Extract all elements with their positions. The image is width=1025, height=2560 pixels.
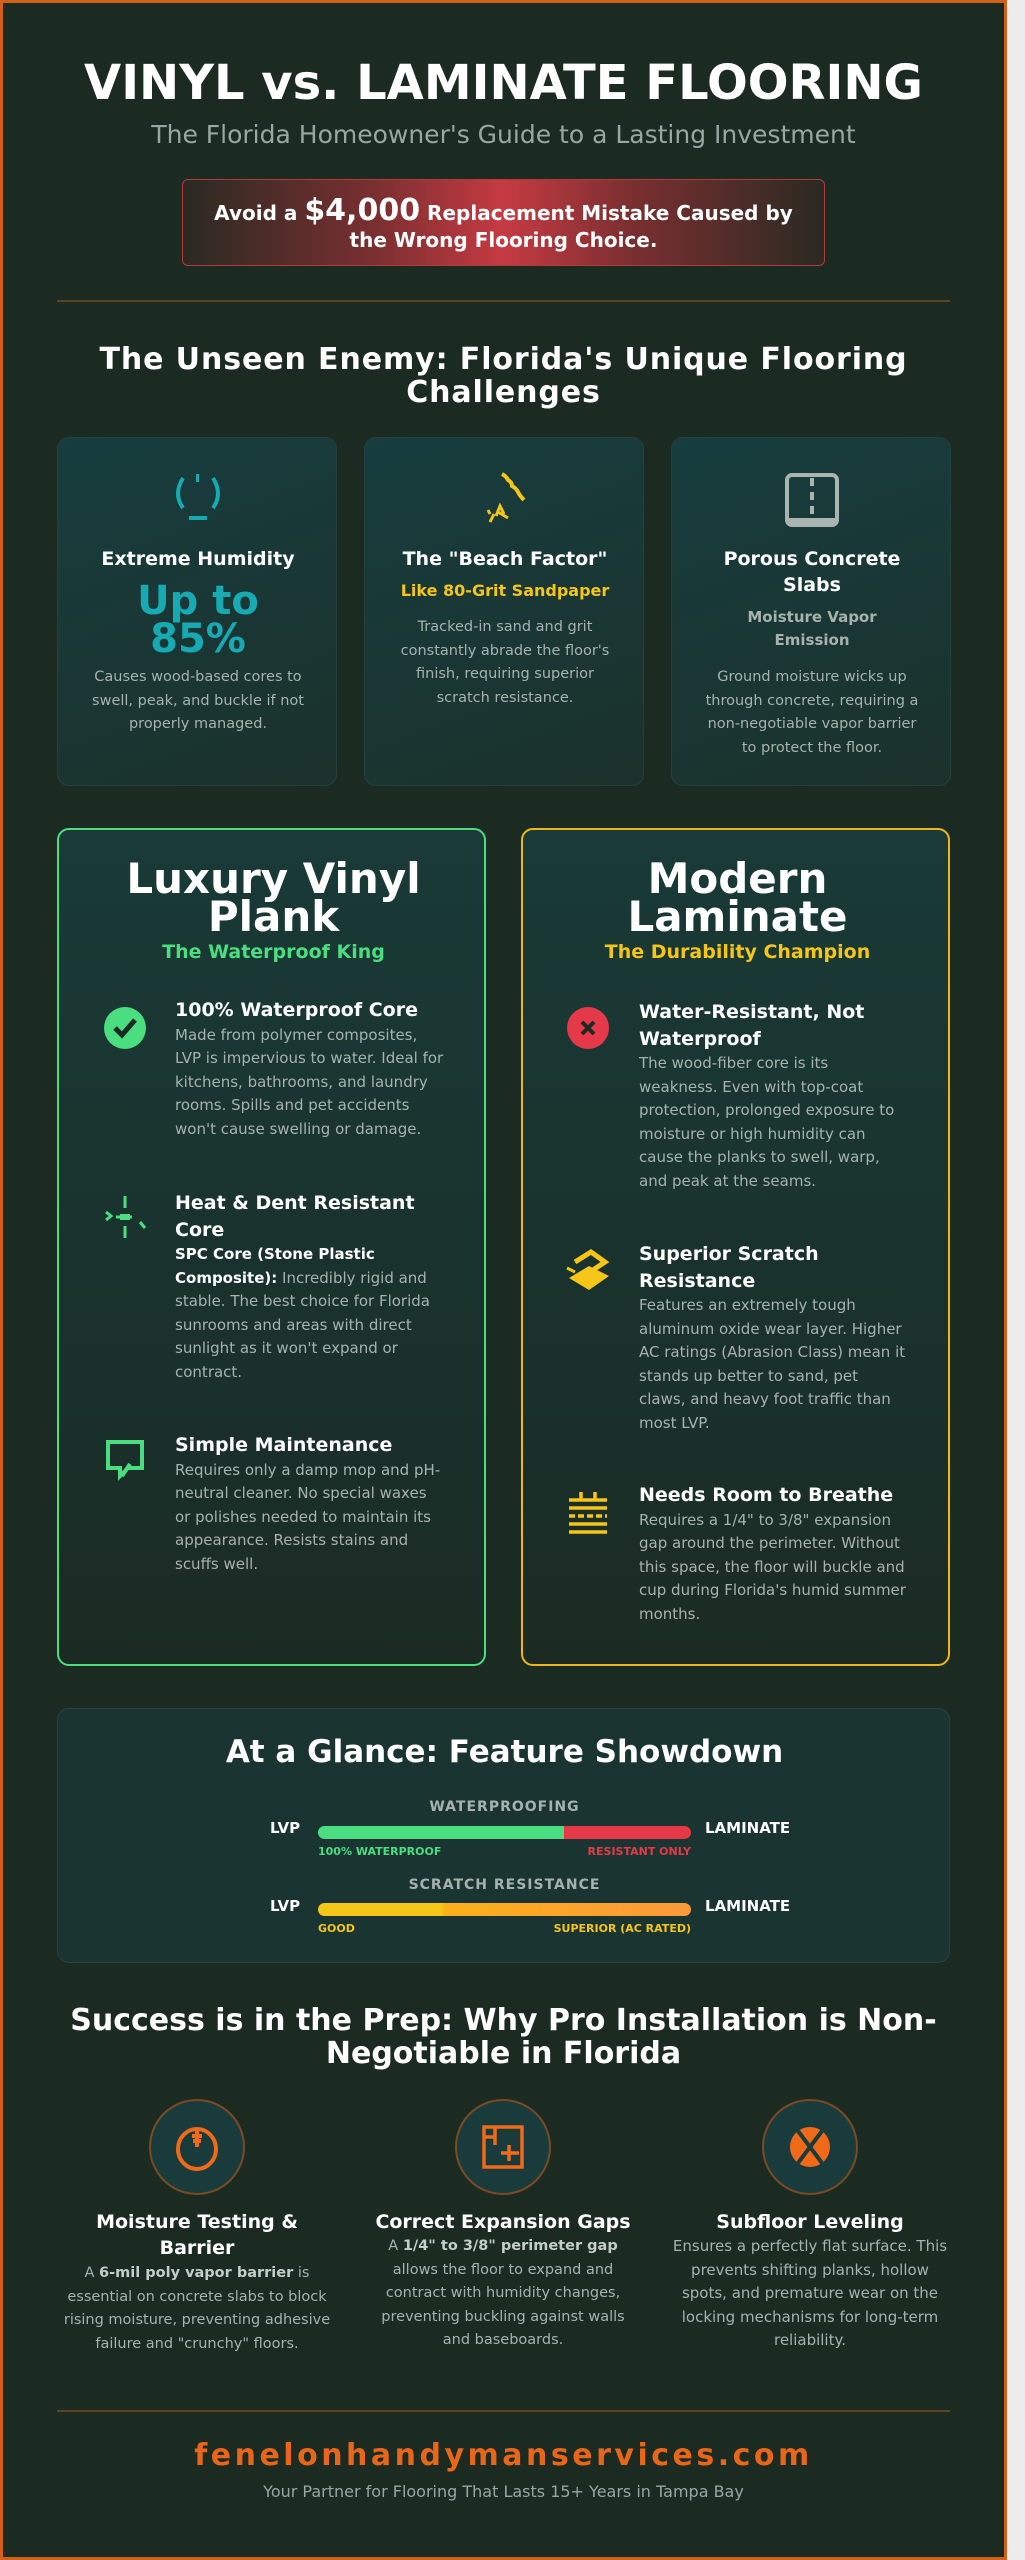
heading: unseen enemy	[99, 342, 908, 410]
item: heat & dent	[175, 1192, 430, 1380]
card text	[706, 669, 918, 756]
item: water-resistant: and peak at the seams.	[639, 1172, 816, 1190]
callout: $4,000 warning: Avoid a $4,000 Replacement Mistake Caused by	[214, 193, 793, 228]
item: waterproof core: rooms. Spills and pet accidents	[175, 1096, 409, 1114]
panel: luxury vinyl plank	[57, 828, 486, 1666]
item: water-resistant: moisture or high humidity can	[639, 1124, 866, 1142]
chart: scratch resistance: LAMINATE	[705, 1897, 790, 1915]
item: waterproof core: Made from polymer composites,	[175, 1026, 417, 1044]
item: heat & dent: sunrooms and areas with direct	[175, 1316, 412, 1334]
item: waterproof core: won't cause swelling or damage.	[175, 1120, 421, 1138]
item: water-resistant: protection, prolonged exposure to	[639, 1101, 894, 1119]
column: expansion gaps	[375, 2099, 631, 2348]
chart: waterproofing: WATERPROOFING	[429, 1799, 580, 1815]
text: A 6-mil poly vapor barrier is essential on concrete slabs to block rising moisture, preventing adhesive failure and "crunchy" floors.	[64, 2265, 330, 2352]
item: heat & dent: contract.	[175, 1362, 242, 1380]
icon: x	[567, 1007, 609, 1049]
column: moisture testing	[64, 2099, 330, 2352]
item: water-resistant: cause the planks to swell, warp,	[639, 1148, 880, 1166]
item: simple maintenance: appearance. Resists stains and	[175, 1531, 408, 1549]
footer: tagline: Your Partner for Flooring That Lasts 15+ Years in Tampa Bay	[263, 2482, 744, 2501]
title: Subfloor Leveling	[716, 2211, 904, 2233]
text: Ensures a perfectly flat surface. This prevents shifting planks, hollow spots, and premature wear on the locking mechanisms for long-term reliability.	[673, 2237, 947, 2349]
item: scratch resistance: claws, and heavy foot traffic than	[639, 1390, 891, 1408]
card subtitle: Like 80-Grit Sandpaper	[401, 581, 609, 600]
chart: scratch resistance: SCRATCH RESISTANCE	[409, 1877, 600, 1893]
icon: floor plan	[455, 2099, 551, 2195]
item: scratch resistance: Resistance	[639, 1270, 755, 1292]
title: Correct Expansion Gaps	[375, 2211, 631, 2233]
item: needs room to breathe: months.	[639, 1604, 700, 1622]
item: scratch resistance: Superior Scratch	[639, 1243, 819, 1265]
callout: $4,000 warning: the Wrong Flooring Choice.	[350, 228, 657, 252]
title: Barrier	[160, 2237, 234, 2259]
chart: waterproofing: 100% WATERPROOF	[318, 1845, 441, 1858]
card subtitle	[747, 608, 877, 649]
heading: unseen enemy: Challenges	[406, 375, 601, 410]
item: waterproof core: 100% Waterproof Core	[175, 999, 418, 1021]
item: simple maintenance: or polishes needed to maintain its	[175, 1508, 431, 1526]
item: needs room to breathe: cup during Florida's humid summer	[639, 1581, 906, 1599]
item: water-resistant: The wood-fiber core is its	[639, 1054, 828, 1072]
icon: level	[762, 2099, 858, 2195]
card subtitle: Moisture Vapor	[747, 608, 877, 626]
icon: check	[104, 1007, 146, 1049]
panel: beach factor	[364, 437, 644, 786]
tagline: The Durability Champion	[605, 941, 870, 963]
item: heat & dent: Core	[175, 1218, 224, 1240]
heading: At a Glance: Feature Showdown	[226, 1734, 783, 1770]
text: A 1/4" to 3/8" perimeter gap allows the floor to expand and contract with humidity changes, preventing buckling against walls and baseboards.	[381, 2238, 625, 2348]
item: scratch resistance: aluminum oxide wear layer. Higher	[639, 1320, 902, 1338]
chart: scratch resistance	[270, 1877, 790, 1935]
item: heat & dent: Heat & Dent Resistant	[175, 1192, 415, 1214]
item: heat & dent: sunlight as it won't expand or	[175, 1339, 398, 1357]
heading: unseen enemy: The Unseen Enemy: Florida's Unique Flooring	[99, 342, 908, 377]
panel title	[126, 854, 421, 941]
item: water-resistant: weakness. Even with top-coat	[639, 1078, 863, 1096]
item: simple maintenance: scuffs well.	[175, 1554, 258, 1572]
chart: scratch resistance: LVP	[270, 1897, 300, 1915]
item: scratch resistance: Features an extremely tough	[639, 1296, 856, 1314]
card text: through concrete, requiring a	[706, 692, 918, 708]
card text: Tracked-in sand and grit constantly abrade the floor's finish, requiring superior scratch resistance.	[401, 619, 609, 706]
panel title	[627, 854, 848, 941]
panel title: Luxury Vinyl	[126, 854, 421, 903]
card text: to protect the floor.	[742, 740, 882, 756]
item: scratch resistance: AC ratings (Abrasion Class) mean it	[639, 1343, 905, 1361]
card text: non-negotiable vapor barrier	[708, 716, 916, 732]
item: water-resistant	[638, 1001, 894, 1190]
title: VINYL vs. LAMINATE FLOORING	[84, 55, 923, 111]
stat: up to 85%	[137, 578, 259, 662]
card title: Porous Concrete	[724, 548, 900, 570]
item: water-resistant: Water-Resistant, Not	[639, 1001, 864, 1023]
card text: Ground moisture wicks up	[717, 669, 907, 685]
subtitle: The Florida Homeowner's Guide to a Lasting Investment	[151, 120, 856, 149]
heading: pro installation: Success is in the Prep: Why Pro Installation is Non-	[70, 2003, 937, 2038]
icon: humidity	[176, 474, 220, 520]
card title	[724, 548, 900, 596]
item: simple maintenance: Requires only a damp mop and pH-	[175, 1460, 440, 1478]
item: simple maintenance: neutral cleaner. No special waxes	[175, 1484, 427, 1502]
heading: pro installation	[70, 2003, 937, 2071]
stat: up to 85%: 85%	[150, 616, 246, 662]
card title: Slabs	[783, 574, 841, 596]
panel title: Modern	[648, 854, 827, 903]
item: needs room to breathe: gap around the perimeter. Without	[639, 1534, 900, 1552]
chart: scratch resistance: GOOD	[318, 1922, 355, 1935]
item: needs room to breathe: Needs Room to Breathe	[639, 1484, 893, 1506]
item: simple maintenance	[175, 1434, 440, 1572]
chart: waterproofing	[270, 1799, 790, 1858]
panel: porous concrete	[671, 437, 951, 786]
chart: waterproofing: LVP	[270, 1819, 300, 1837]
item: scratch resistance: most LVP.	[639, 1414, 710, 1432]
item: needs room to breathe: Requires a 1/4" to 3/8" expansion	[639, 1510, 891, 1528]
item: needs room to breathe: this space, the floor will buckle and	[639, 1558, 905, 1576]
icon: heat	[105, 1196, 146, 1238]
panel: feature showdown	[57, 1708, 950, 1963]
column: subfloor leveling	[673, 2099, 947, 2349]
callout: $4,000 warning	[182, 179, 825, 266]
icon: expansion	[569, 1492, 607, 1534]
card text: Causes wood-based cores to swell, peak, and buckle if not properly managed.	[92, 669, 304, 732]
item: scratch resistance: stands up better to sand, pet	[639, 1366, 858, 1384]
item: water-resistant: Waterproof	[639, 1028, 761, 1050]
item: simple maintenance: Simple Maintenance	[175, 1434, 392, 1456]
item: waterproof core: LVP is impervious to water. Ideal for	[175, 1049, 443, 1067]
item: heat & dent: SPC Core (Stone Plastic	[175, 1245, 375, 1263]
heading: pro installation: Negotiable in Florida	[326, 2036, 681, 2071]
panel title: Plank	[208, 892, 339, 941]
title	[96, 2211, 298, 2259]
card title: The "Beach Factor"	[403, 548, 607, 570]
item: heat & dent: stable. The best choice for Florida	[175, 1292, 430, 1310]
tagline: The Waterproof King	[162, 941, 385, 963]
item: scratch resistance	[639, 1243, 905, 1432]
card subtitle: Emission	[774, 631, 850, 649]
item: heat & dent: Composite): Incredibly rigid and	[175, 1268, 427, 1286]
chart: waterproofing: RESISTANT ONLY	[588, 1845, 691, 1858]
title: Moisture Testing &	[96, 2211, 298, 2233]
panel: modern laminate	[521, 828, 950, 1666]
panel: extreme humidity	[57, 437, 337, 786]
item: waterproof core: kitchens, bathrooms, and laundry	[175, 1072, 428, 1090]
icon: sand	[486, 472, 526, 523]
icon: scratch	[566, 1249, 610, 1290]
icon: moisture meter	[149, 2099, 245, 2195]
chart: waterproofing: LAMINATE	[705, 1819, 790, 1837]
icon: slab	[785, 473, 839, 527]
item: needs room to breathe	[639, 1484, 906, 1622]
card title: Extreme Humidity	[101, 548, 295, 570]
icon: maintenance	[106, 1440, 144, 1481]
footer: website: fenelonhandymanservices.com	[194, 2438, 813, 2473]
stat: up to 85%: Up to	[137, 578, 259, 624]
item: waterproof core	[175, 999, 444, 1138]
chart: scratch resistance: SUPERIOR (AC RATED)	[554, 1922, 691, 1935]
panel title: Laminate	[627, 892, 848, 941]
